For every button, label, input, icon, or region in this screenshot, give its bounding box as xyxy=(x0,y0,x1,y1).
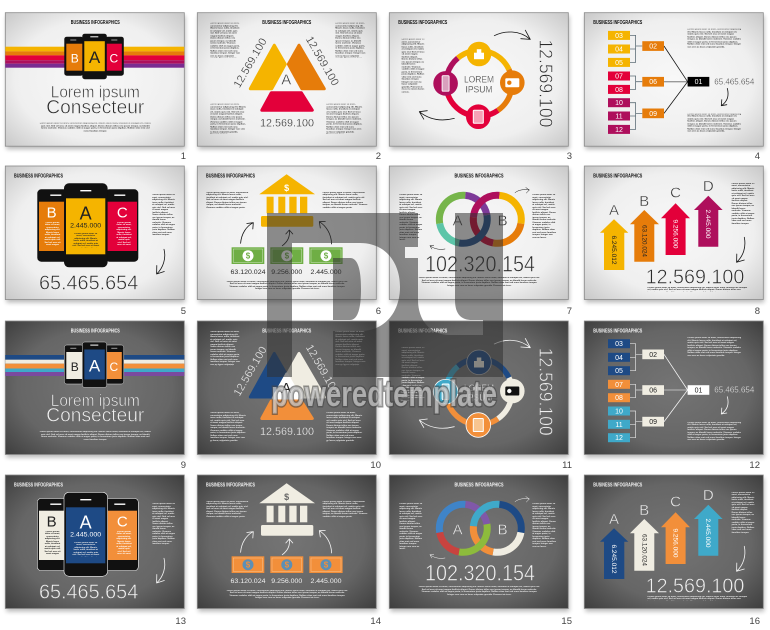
headline: Consecteur xyxy=(46,97,145,118)
ring label: IPSUM xyxy=(465,84,492,94)
arrow bar A: A xyxy=(609,202,619,219)
text left: Lorem ipsum dolor sit amet, consectetur adipiscing elit. Mauris lacus nulla, tincidunt at volutpat vel, mattis quis nisl. Sed vel arcu sit amet magna facilisis aliquet. Donec dictum tellus nec ipsum tempor, ac blandit lorem molestie. Vivamus sodales nibh at augue porta. xyxy=(206,501,248,518)
phone B xyxy=(37,498,69,571)
text top: Lorem ipsum dolor sit amet, consectetur adipiscing elit. Mauris lacus nulla, tincidunt at volutpat vel, mattis quis nisl. Sed vel arcu sit amet magna facilisis aliquet. Donec dictum tellus nec ipsum tempor, ac blandit lorem molestie. Vivamus sodales nibh at augue porta, in fermentum justo dapibus. Nullam vitae erat sed nunc faucibus tempor. Integer non sem ac lacus vulputate gravida. xyxy=(687,29,741,48)
text top: Lorem ipsum dolor sit amet, consectetur adipiscing elit. Mauris lacus nulla, tincidunt at volutpat vel, mattis quis nisl. Sed vel arcu sit amet magna facilisis aliquet. Donec dictum tellus nec ipsum tempor, ac blandit lorem molestie. Vivamus sodales nibh at augue porta, in fermentum justo dapibus. Nullam vitae erat sed nunc faucibus tempor. Integer non sem ac lacus vulputate gravida. xyxy=(687,337,741,357)
big vertical value: 12.569.100 xyxy=(535,348,556,436)
phone A: 2.445.000 xyxy=(70,222,102,229)
box column 1: 05 xyxy=(615,60,623,67)
arrow bar A: 6.245.012 xyxy=(610,544,617,574)
heading: BUSINESS INFOGRAPHICS xyxy=(593,20,643,26)
body text: Lorem ipsum dolor sit amet, consectetur adipiscing elit. Mauris lacus nulla, tincidunt at volutpat vel, mattis quis nisl. Sed vel arcu sit amet magna facilisis aliquet. Donec dictum tellus nec ipsum tempor, ac blandit lorem molestie. Vivamus sodales nibh at augue porta, in fermentum justo dapibus. Nullam vitae erat sed nunc faucibus tempor. xyxy=(40,123,151,132)
ring labels: A xyxy=(453,213,463,230)
box column 1 xyxy=(608,339,630,442)
arrow bar D xyxy=(694,487,723,556)
phone C: C xyxy=(109,52,118,66)
icon node: top xyxy=(467,42,491,66)
page numbers: 6 xyxy=(376,306,381,317)
linked rings xyxy=(439,195,521,243)
phone B: B xyxy=(47,513,57,530)
ring label: LOREM xyxy=(464,75,494,85)
arrow: bottom xyxy=(419,419,454,428)
phone C: C xyxy=(109,360,118,374)
heading: BUSINESS INFOGRAPHICS xyxy=(593,173,643,179)
text left: Lorem ipsum dolor sit amet, consectetur adipiscing elit. Mauris lacus nulla, tincidunt at volutpat vel, mattis quis nisl. Sed vel arcu sit amet magna facilisis aliquet. Donec dictum tellus nec ipsum tempor, ac blandit lorem molestie. Vivamus sodales nibh at augue porta, in fermentum justo dapibus. Nullam vitae erat sed nunc faucibus tempor. Integer non sem ac lacus. xyxy=(399,503,422,550)
arrow: left xyxy=(241,223,253,243)
text column: Lorem ipsum dolor sit amet, consectetur adipiscing elit. Mauris lacus nulla, tincidunt at volutpat vel, mattis quis nisl. Sed vel arcu sit amet magna facilisis aliquet. Donec dictum tellus nec ipsum tempor, ac blandit lorem molestie. Vivamus sodales nibh at augue porta, in fermentum justo dapibus. Nullam vitae erat sed nunc faucibus tempor. xyxy=(732,183,755,225)
box column 2 xyxy=(642,41,664,118)
box column 1: 03 xyxy=(615,341,623,348)
arrow: bottom xyxy=(419,111,454,120)
big vertical value: 12.569.100 xyxy=(535,39,556,127)
panel: slide 15 xyxy=(389,475,569,612)
arrow bar C: C xyxy=(670,185,681,202)
box column 1: 10 xyxy=(615,408,623,416)
box column 2: 06 xyxy=(649,388,657,394)
arrow: right xyxy=(319,530,332,553)
ring labels xyxy=(453,522,508,539)
heading: BUSINESS INFOGRAPHICS xyxy=(14,482,63,488)
icon: banknote 1: $ xyxy=(246,252,251,260)
phone A: 2.445.000 xyxy=(70,531,102,538)
arrow: left xyxy=(241,532,253,552)
ring label: LOREM xyxy=(464,383,494,393)
phone C xyxy=(105,498,138,571)
text column: Lorem ipsum dolor sit amet, consectetur adipiscing elit. Mauris lacus nulla, tincidunt at volutpat vel, mattis quis nisl. Sed vel arcu sit amet magna facilisis aliquet. Donec dictum tellus nec ipsum tempor, ac blandit lorem molestie. Vivamus sodales nibh at augue porta, in fermentum justo dapibus. Nullam vitae erat sed nunc faucibus tempor. Integer non sem ac lacus vulputate gravida. Praesent at risus eu massa luctus cursus. xyxy=(402,39,425,93)
triangle diagram xyxy=(250,354,324,418)
icon: banknote 1 xyxy=(232,247,264,264)
arrow bar C xyxy=(661,185,690,255)
value bottom: 12.569.100 xyxy=(260,118,314,130)
value bottom: 12.569.100 xyxy=(260,426,314,438)
box 01 xyxy=(688,385,709,395)
panel: slide 16 xyxy=(584,475,764,612)
phone A xyxy=(64,183,108,267)
page numbers: 16 xyxy=(749,616,760,627)
connector lines xyxy=(630,344,688,438)
box column 2: 02 xyxy=(649,43,657,50)
big value: 65.465.654 xyxy=(39,581,138,603)
page numbers: 11 xyxy=(562,460,572,471)
arrow bar D: D xyxy=(703,178,714,195)
phone A: A xyxy=(80,512,92,532)
phone A: A xyxy=(89,48,101,67)
page numbers: 8 xyxy=(755,306,760,317)
text column: Lorem ipsum dolor sit amet, consectetur adipiscing elit. Mauris lacus nulla, tincidunt at volutpat vel, mattis quis nisl. Sed vel arcu sit amet magna facilisis aliquet. Donec dictum tellus nec ipsum tempor, ac blandit lorem molestie. Vivamus sodales nibh at augue porta, in fermentum justo dapibus. Nullam vitae erat sed nunc faucibus tempor. xyxy=(732,492,755,534)
box column 1: 07 xyxy=(615,74,623,81)
panel: slide 4 xyxy=(584,13,764,149)
text bottom: Lorem ipsum dolor sit amet, consectetur adipiscing elit. Mauris lacus nulla, tincidunt at volutpat vel, mattis quis nisl. Sed vel arcu sit amet magna facilisis aliquet. Donec dictum tellus nec ipsum tempor, ac blandit lorem molestie. Vivamus sodales nibh at augue porta, in fermentum justo dapibus. Nullam vitae erat sed nunc faucibus tempor. Integer non sem ac lacus vulputate gravida. xyxy=(687,422,741,441)
arrow bar A xyxy=(600,202,628,270)
box column 1: 11 xyxy=(615,114,623,121)
ring labels xyxy=(453,213,508,230)
icon: banknote 1: $ xyxy=(246,560,251,570)
value left: 12.569.100 xyxy=(232,36,270,90)
headline: Consecteur xyxy=(46,406,145,427)
heading: BUSINESS INFOGRAPHICS xyxy=(262,328,312,334)
banknote values: 2.445.000 xyxy=(310,269,342,276)
heading: BUSINESS INFOGRAPHICS xyxy=(593,482,643,488)
icon: banknote 2: $ xyxy=(285,560,290,570)
phone A xyxy=(82,34,107,79)
phone C xyxy=(105,189,138,262)
linked rings xyxy=(439,504,521,552)
arrow bar A xyxy=(600,511,628,579)
arrow bar C: C xyxy=(670,494,681,511)
icon: banknote 3: $ xyxy=(324,560,329,570)
bottom text: Lorem ipsum dolor sit amet, consectetur adipiscing elit. Mauris lacus nulla, tincidunt at volutpat vel, mattis quis nisl. Sed vel arcu sit amet magna facilisis aliquet. Donec dictum tellus nec ipsum tempor, ac blandit lorem molestie. Vivamus sodales nibh at augue porta, in fermentum justo dapibus. Nullam vitae erat sed nunc faucibus tempor. Integer non sem ac lacus vulputate gravida. Praesent at risus. xyxy=(419,277,540,286)
arrow: middle xyxy=(282,539,293,555)
bottom text: Lorem ipsum dolor sit amet, consectetur adipiscing elit. Mauris lacus nulla, tincidunt at volutpat vel, mattis quis nisl. Sed vel arcu sit amet magna facilisis aliquet. Donec dictum tellus nec ipsum tempor, ac blandit lorem molestie. Vivamus sodales nibh at augue porta, in fermentum justo dapibus. Nullam vitae erat sed nunc faucibus tempor. Integer non sem ac lacus vulputate gravida. Praesent at risus. xyxy=(419,586,540,596)
heading: BUSINESS INFOGRAPHICS xyxy=(398,328,448,334)
watermark: pt logo block xyxy=(267,213,503,377)
arrow bar D: 2.445.000 xyxy=(704,518,711,548)
page numbers: 15 xyxy=(561,616,572,627)
icon: banknote 3 xyxy=(309,556,343,573)
big value: 65.465.654 xyxy=(39,272,138,294)
arrow bar A: A xyxy=(609,511,619,528)
ring label: IPSUM xyxy=(465,393,492,403)
bottom text: Lorem ipsum dolor sit amet, consectetur adipiscing elit. Mauris lacus nulla, tincidunt at volutpat vel, mattis quis nisl. Sed vel arcu sit amet magna facilisis aliquet. Donec dictum tellus nec ipsum tempor, ac blandit lorem molestie. Vivamus sodales nibh at augue porta, in fermentum justo dapibus. Nullam vitae erat sed nunc faucibus tempor. Integer non sem ac lacus vulputate gravida. Praesent at risus. xyxy=(227,281,348,290)
ring label xyxy=(464,75,494,94)
text left: Lorem ipsum dolor sit amet, consectetur adipiscing elit. Mauris lacus nulla, tincidunt at volutpat vel, mattis quis nisl. Sed vel arcu sit amet magna facilisis aliquet. Donec dictum tellus nec ipsum tempor, ac blandit lorem molestie. Vivamus sodales nibh at augue porta. xyxy=(206,192,248,209)
panel: slide 11 xyxy=(389,321,569,458)
phone A: A xyxy=(89,356,101,376)
box 01 xyxy=(688,77,709,86)
value: 65.465.654 xyxy=(714,77,755,86)
banknote values: 2.445.000 xyxy=(310,578,342,585)
arrow: middle xyxy=(282,230,293,246)
ring labels: B xyxy=(498,213,508,230)
text right: Lorem ipsum dolor sit amet, consectetur adipiscing elit. Mauris lacus nulla, tincidunt at volutpat vel, mattis quis nisl. Sed vel arcu sit amet magna facilisis aliquet. Donec dictum tellus nec ipsum tempor, ac blandit lorem molestie. Vivamus sodales nibh at augue porta. xyxy=(323,501,368,518)
page numbers xyxy=(175,151,760,627)
heading: BUSINESS INFOGRAPHICS xyxy=(206,173,255,179)
ring label xyxy=(464,383,494,403)
cycle ring xyxy=(446,359,512,425)
box column 1: 05 xyxy=(615,368,623,375)
heading: BUSINESS INFOGRAPHICS xyxy=(454,482,504,488)
arrow xyxy=(721,88,728,106)
banknote values xyxy=(230,269,342,276)
arrow: bottom xyxy=(430,245,445,249)
phone A xyxy=(82,342,107,388)
arrow xyxy=(737,237,745,262)
box column 2: 02 xyxy=(649,352,657,359)
banknote values: 9.256.000 xyxy=(271,578,303,585)
arrow bar D xyxy=(694,178,723,247)
box column 1 xyxy=(608,31,630,134)
box column 1: 04 xyxy=(615,355,623,362)
big value: 12.569.100 xyxy=(646,266,744,288)
heading: BUSINESS INFOGRAPHICS xyxy=(206,482,255,488)
phone C xyxy=(105,37,124,76)
icon node: bottom xyxy=(466,104,491,129)
panel: slide 13 xyxy=(5,475,185,612)
value right: 12.569.100 xyxy=(303,34,341,88)
arrow xyxy=(157,249,165,274)
watermark: poweredtemplate wordmark: poweredtemplate xyxy=(271,373,497,414)
arrow xyxy=(157,558,165,583)
box column 1: 07 xyxy=(615,382,623,389)
icon: banknote 2 xyxy=(270,556,303,573)
box column 2: 06 xyxy=(649,79,657,86)
ring labels: B xyxy=(498,522,508,539)
text right: Lorem ipsum dolor sit amet, consectetur adipiscing elit. Mauris lacus nulla, tincidunt at volutpat vel, mattis quis nisl. Sed vel arcu sit amet magna facilisis aliquet. Donec dictum tellus nec ipsum tempor, ac blandit lorem molestie. Vivamus sodales nibh at augue porta, in fermentum justo dapibus. Nullam vitae erat sed nunc faucibus tempor. Integer non sem ac lacus. xyxy=(532,194,556,239)
arrow bar B: 63.120.024 xyxy=(640,225,647,257)
panel: slide 5 xyxy=(5,166,185,302)
arrow bar C xyxy=(661,494,690,564)
icon: bank xyxy=(259,174,315,227)
panel: slide 2 xyxy=(197,13,377,149)
triangle diagram: A xyxy=(281,72,291,89)
arrow bar B xyxy=(630,502,659,571)
text column: Lorem ipsum dolor sit amet, consectetur adipiscing elit. Mauris lacus nulla, tincidunt at volutpat vel, mattis quis nisl. Sed vel arcu sit amet magna facilisis aliquet. Donec dictum tellus nec ipsum tempor, ac blandit lorem molestie. Vivamus sodales nibh at augue porta, in fermentum justo dapibus. Nullam vitae erat sed nunc faucibus tempor. xyxy=(152,503,175,545)
box column 1: 08 xyxy=(615,395,623,402)
box 01: 01 xyxy=(695,388,702,394)
page numbers: 7 xyxy=(567,306,572,317)
arrow bar B: 63.120.024 xyxy=(640,534,647,566)
box 01: 01 xyxy=(695,79,702,86)
triangle diagram: A xyxy=(281,380,291,397)
box column 2 xyxy=(642,350,664,426)
icon: banknote 3: $ xyxy=(324,252,329,260)
panel: slide 14 xyxy=(197,475,377,612)
headline: Lorem ipsum xyxy=(51,84,140,102)
heading: BUSINESS INFOGRAPHICS xyxy=(71,20,120,26)
arrow bar D: D xyxy=(703,487,714,504)
arrow xyxy=(737,546,745,571)
text right: Lorem ipsum dolor sit amet, consectetur adipiscing elit. Mauris lacus nulla, tincidunt at volutpat vel, mattis quis nisl. Sed vel arcu sit amet magna facilisis aliquet. Donec dictum tellus nec ipsum tempor, ac blandit lorem molestie. Vivamus sodales nibh at augue porta, in fermentum justo dapibus. Nullam vitae erat sed nunc faucibus tempor. Integer non sem ac lacus. xyxy=(532,503,556,548)
phone B: B xyxy=(71,52,79,66)
big value: 102.320.154 xyxy=(425,561,535,586)
heading: BUSINESS INFOGRAPHICS xyxy=(593,328,643,334)
box column 1: 08 xyxy=(615,87,623,94)
arrow: top xyxy=(515,188,529,193)
icon node: bottom xyxy=(466,413,491,437)
icon node: right xyxy=(500,70,525,95)
arrow bar B: B xyxy=(639,193,649,210)
big value: 102.320.154 xyxy=(425,252,535,277)
phone C xyxy=(105,345,124,384)
phone B: B xyxy=(47,204,57,221)
icon node: left xyxy=(433,379,458,404)
bottom text: Lorem ipsum dolor sit amet, consectetur adipiscing elit. Mauris lacus nulla, tincidunt at volutpat vel, mattis quis nisl. Sed vel arcu sit amet magna facilisis aliquet. Donec dictum tellus nec ipsum tempor, ac blandit lorem molestie. Vivamus sodales nibh at augue porta, in fermentum justo dapibus. Nullam vitae erat sed nunc faucibus tempor. Integer non sem ac lacus vulputate gravida. Praesent at risus. xyxy=(227,590,348,599)
phone C: C xyxy=(117,513,128,530)
arrow: bottom xyxy=(430,554,445,558)
phone B xyxy=(64,37,83,76)
panel: slide 8 xyxy=(584,166,764,302)
headline xyxy=(46,84,145,118)
ring labels: A xyxy=(453,522,463,539)
heading: BUSINESS INFOGRAPHICS xyxy=(262,20,312,26)
panel: slide 9 xyxy=(5,321,185,458)
banknote values: 63.120.024 xyxy=(231,269,266,276)
text column: Lorem ipsum dolor sit amet, consectetur adipiscing elit. Mauris lacus nulla, tincidunt at volutpat vel, mattis quis nisl. Sed vel arcu sit amet magna facilisis aliquet. Donec dictum tellus nec ipsum tempor, ac blandit lorem molestie. Vivamus sodales nibh at augue porta, in fermentum justo dapibus. Nullam vitae erat sed nunc faucibus tempor. xyxy=(152,194,175,236)
box column 1: 12 xyxy=(615,127,623,134)
heading: BUSINESS INFOGRAPHICS xyxy=(454,173,504,179)
panel: slide 3 xyxy=(389,13,569,149)
cycle ring xyxy=(446,50,512,116)
text bottom: Lorem ipsum dolor sit amet, consectetur adipiscing elit. Mauris lacus nulla, tincidunt at volutpat vel, mattis quis nisl. Sed vel arcu sit amet magna facilisis aliquet. Donec dictum tellus nec ipsum tempor, ac blandit lorem molestie. Vivamus sodales nibh at augue porta, in fermentum justo dapibus. Nullam vitae erat sed nunc faucibus tempor. Integer non sem ac lacus vulputate gravida. xyxy=(687,113,741,133)
arrow: right xyxy=(319,222,332,244)
colour stripes xyxy=(5,355,184,376)
heading: BUSINESS INFOGRAPHICS xyxy=(14,173,63,179)
arrow: top xyxy=(515,496,529,502)
text left: Lorem ipsum dolor sit amet, consectetur adipiscing elit. Mauris lacus nulla, tincidunt at volutpat vel, mattis quis nisl. Sed vel arcu sit amet magna facilisis aliquet. Donec dictum tellus nec ipsum tempor, ac blandit lorem molestie. Vivamus sodales nibh at augue porta, in fermentum justo dapibus. Nullam vitae erat sed nunc faucibus tempor. Integer non sem ac lacus. xyxy=(399,194,422,241)
arrow xyxy=(721,397,728,414)
page numbers: 9 xyxy=(181,460,186,471)
icon: bank: $ xyxy=(284,492,289,502)
value left: 12.569.100 xyxy=(232,345,270,398)
arrow: top xyxy=(494,338,530,348)
banknote values: 63.120.024 xyxy=(231,578,266,585)
arrow bar B: B xyxy=(639,502,649,519)
box column 1: 10 xyxy=(615,100,623,107)
page numbers: 14 xyxy=(370,616,381,627)
phone A xyxy=(64,492,108,576)
panel: slide 7 xyxy=(389,166,569,302)
page numbers: 5 xyxy=(181,306,186,317)
page numbers: 13 xyxy=(175,616,186,627)
box column 1: 03 xyxy=(615,33,623,40)
box column 1: 04 xyxy=(615,46,623,53)
headline: Lorem ipsum xyxy=(51,392,140,410)
icon node: right xyxy=(500,379,525,403)
headline xyxy=(46,392,145,427)
phone C: C xyxy=(117,204,128,221)
arrow bar B xyxy=(630,193,659,262)
box column 1: 12 xyxy=(615,435,623,442)
value right: 12.569.100 xyxy=(303,343,341,396)
page numbers: 1 xyxy=(181,151,186,162)
panel: slide 1 xyxy=(5,13,185,149)
icon: banknote 2: $ xyxy=(285,252,290,260)
text column: Lorem ipsum dolor sit amet, consectetur adipiscing elit. Mauris lacus nulla, tincidunt at volutpat vel, mattis quis nisl. Sed vel arcu sit amet magna facilisis aliquet. Donec dictum tellus nec ipsum tempor, ac blandit lorem molestie. Vivamus sodales nibh at augue porta, in fermentum justo dapibus. Nullam vitae erat sed nunc faucibus tempor. Integer non sem ac lacus vulputate gravida. Praesent at risus eu massa luctus cursus. xyxy=(402,347,425,402)
panel: slide 10 xyxy=(197,321,377,458)
banknote values: 9.256.000 xyxy=(271,269,303,276)
page numbers: 4 xyxy=(755,151,760,162)
icon: bank: $ xyxy=(284,183,289,193)
phone A: A xyxy=(80,203,92,223)
big value: 12.569.100 xyxy=(646,575,744,597)
connector lines xyxy=(630,35,688,129)
arrow bar D: 2.445.000 xyxy=(704,209,711,239)
arrow: top xyxy=(494,30,530,39)
icon: bank xyxy=(259,483,315,536)
banknote values xyxy=(230,578,342,585)
phone B xyxy=(64,345,83,384)
icon node: left xyxy=(433,71,458,96)
panel: slide 12 xyxy=(584,321,764,458)
phone B xyxy=(37,189,69,262)
phone B: B xyxy=(71,360,79,374)
box column 1: 11 xyxy=(615,422,623,429)
page numbers: 12 xyxy=(749,460,760,471)
body text: Lorem ipsum dolor sit amet, consectetur adipiscing elit. Mauris lacus nulla, tincidunt at volutpat vel, mattis quis nisl. Sed vel arcu sit amet magna facilisis aliquet. Donec dictum tellus nec ipsum tempor, ac blandit lorem molestie. Vivamus sodales nibh at augue porta, in fermentum justo dapibus. Nullam vitae erat sed nunc faucibus tempor. xyxy=(40,431,151,440)
page numbers: 3 xyxy=(567,151,572,162)
text right: Lorem ipsum dolor sit amet, consectetur adipiscing elit. Mauris lacus nulla, tincidunt at volutpat vel, mattis quis nisl. Sed vel arcu sit amet magna facilisis aliquet. Donec dictum tellus nec ipsum tempor, ac blandit lorem molestie. Vivamus sodales nibh at augue porta. xyxy=(323,192,368,209)
heading: BUSINESS INFOGRAPHICS xyxy=(398,20,448,26)
icon: banknote 2 xyxy=(270,247,303,264)
triangle diagram xyxy=(250,45,324,110)
arrow bar C: 9.256.000 xyxy=(671,528,678,558)
page numbers: 2 xyxy=(376,151,381,162)
icon: banknote 1 xyxy=(232,556,264,573)
arrow bar C: 9.256.000 xyxy=(671,219,678,249)
value: 65.465.654 xyxy=(714,386,755,395)
icon node: top xyxy=(467,350,491,375)
arrow bar A: 6.245.012 xyxy=(610,235,617,265)
box column 2: 09 xyxy=(649,419,657,426)
page numbers: 10 xyxy=(370,460,381,471)
heading: BUSINESS INFOGRAPHICS xyxy=(71,328,120,334)
panel: slide 6 xyxy=(197,166,377,302)
box column 2: 09 xyxy=(649,111,657,118)
icon: banknote 3 xyxy=(309,247,343,264)
colour stripes xyxy=(5,47,184,68)
